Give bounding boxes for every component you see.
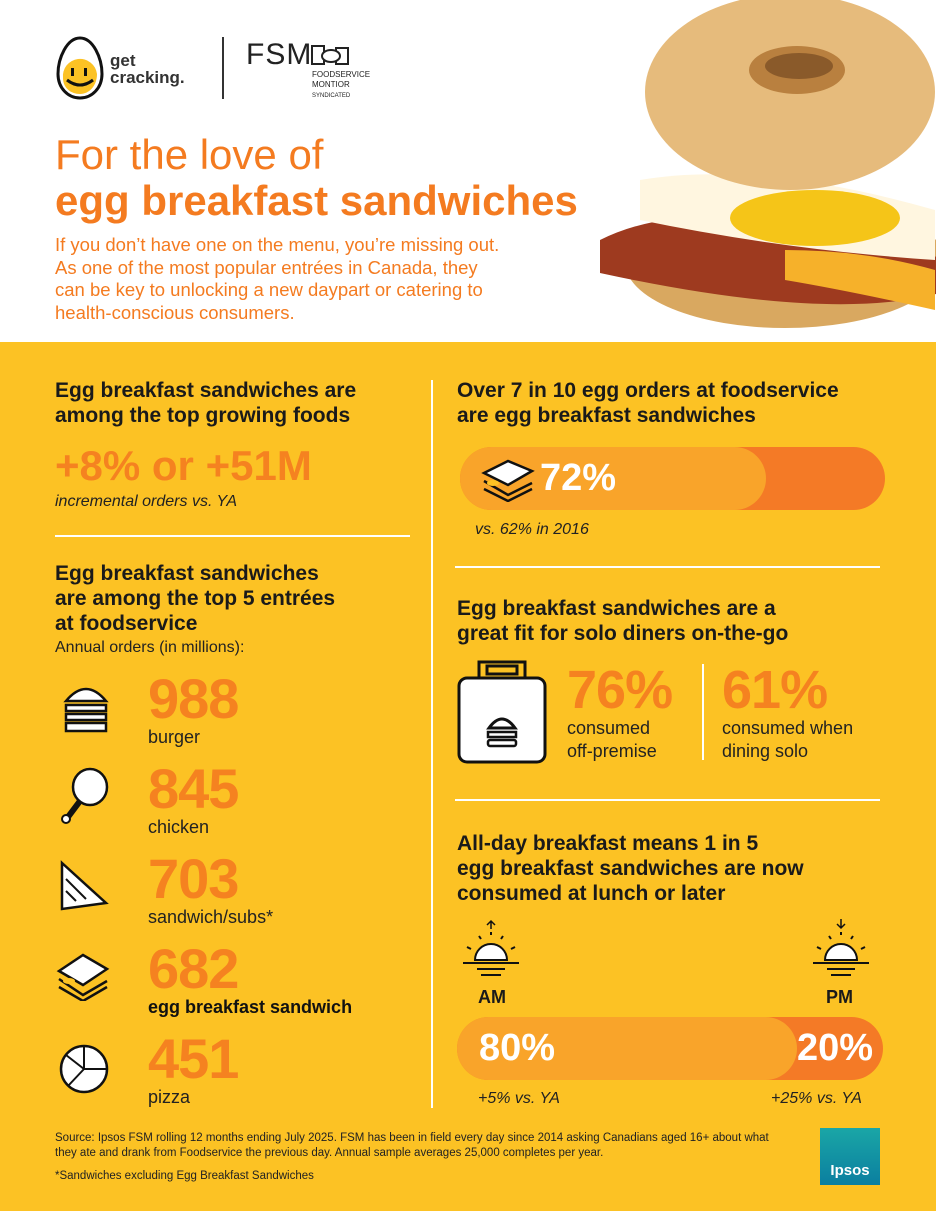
- logo: get cracking: [56, 36, 185, 100]
- item: pizza: pizza: [148, 1087, 190, 1107]
- subtitle: [55, 234, 499, 322]
- item: burger: 988: [148, 667, 238, 730]
- panel: solo diners: dining solo: [722, 741, 808, 761]
- panel: solo diners: 61%: [722, 660, 827, 720]
- panel: solo diners: off-premise: [567, 741, 657, 761]
- footer: source: Source: Ipsos FSM rolling 12 months ending July 2025. FSM has been in field every day since 2014 asking Canadians aged 16+ about what they ate and drank from Foodservice the previous day. Annual sample averages 25,000 completes per year.: [55, 1132, 769, 1158]
- panel: solo diners: Egg breakfast sandwiches are a great fit for solo diners on-the-go: [457, 597, 788, 645]
- panel: all-day breakfast: +5% vs. YA: [478, 1090, 560, 1107]
- panel: solo diners: 76%: [567, 660, 672, 720]
- item: sandwich: sandwich/subs*: [148, 907, 273, 927]
- icon: sunrise AM: AM: [478, 987, 506, 1007]
- item: chicken: chicken: [148, 817, 209, 837]
- subtitle: can be key to unlocking a new daypart or catering to: [55, 279, 483, 300]
- panel: top 5 entrees: [55, 562, 352, 1107]
- panel: 7 in 10: vs. 62% in 2016: [475, 521, 589, 538]
- subtitle: health-conscious consumers.: [55, 302, 295, 322]
- logo: FSM: [246, 38, 370, 99]
- item: egg breakfast sandwich: [56, 937, 352, 1017]
- logo: get cracking: cracking.: [110, 68, 185, 87]
- image: bagel sandwich: [600, 0, 936, 328]
- icon: sunset PM: PM: [826, 987, 853, 1007]
- item: chicken: [61, 757, 238, 837]
- panel: 7 in 10: [457, 379, 885, 538]
- bar: 72%: [460, 447, 885, 510]
- footer: source: *Sandwiches excluding Egg Breakfast Sandwiches: [55, 1170, 314, 1182]
- logo: FSM: FOODSERVICE: [312, 70, 370, 79]
- item: burger: burger: [148, 727, 200, 747]
- yellow panel: [0, 342, 936, 1211]
- panel: top growing: +8% or +51M: [55, 442, 312, 489]
- logo: FSM: MONTIOR: [312, 80, 350, 89]
- item: burger: [63, 667, 238, 747]
- panel: top growing: Egg breakfast sandwiches are among the top growing foods: [55, 379, 356, 427]
- item: pizza: 451: [148, 1027, 238, 1090]
- panel: all-day breakfast: [457, 832, 883, 1107]
- subtitle: If you don’t have one on the menu, you’re missing out.: [55, 234, 499, 255]
- icon: sunrise AM: [463, 920, 519, 1007]
- logo: Ipsos: Ipsos: [830, 1162, 870, 1179]
- panel: all-day breakfast: +25% vs. YA: [771, 1090, 862, 1107]
- bar: 80/20: [457, 1017, 883, 1080]
- panel: top 5 entrees: Egg breakfast sandwiches are among the top 5 entrées at foodservice: [55, 562, 335, 635]
- panel: solo diners: consumed: [567, 718, 650, 738]
- item: sandwich: 703: [148, 847, 238, 910]
- panel: top growing: [55, 379, 356, 510]
- panel: top growing: incremental orders vs. YA: [55, 493, 237, 510]
- icon: sunset PM: [813, 919, 869, 1007]
- title: For the love of: [55, 131, 323, 178]
- logo: get cracking: get: [110, 51, 136, 70]
- item: sandwich: [60, 847, 273, 927]
- panel: all-day breakfast: consumed at lunch or later: [457, 882, 725, 905]
- bar: 72%: 72%: [540, 457, 616, 499]
- panel: 7 in 10: Over 7 in 10 egg orders at foodservice are egg breakfast sandwiches: [457, 379, 839, 427]
- panel: all-day breakfast: All-day breakfast means 1 in 5: [457, 832, 758, 855]
- item: pizza: [60, 1027, 238, 1107]
- panel: solo diners: [457, 597, 853, 764]
- logo: FSM: SYNDICATED: [312, 93, 350, 99]
- item: egg breakfast sandwich: egg breakfast sandwich: [148, 997, 352, 1017]
- title: [55, 131, 578, 224]
- bar: 80/20: 80%: [479, 1027, 555, 1069]
- logo: Ipsos: [820, 1128, 880, 1185]
- bar: 80/20: 20%: [797, 1027, 873, 1069]
- panel: solo diners: consumed when: [722, 718, 853, 738]
- panel: top 5 entrees: Annual orders (in millions):: [55, 639, 244, 656]
- item: chicken: 845: [148, 757, 238, 820]
- logo: FSM: FSM: [246, 38, 312, 71]
- panel: all-day breakfast: egg breakfast sandwiches are now: [457, 857, 804, 880]
- subtitle: As one of the most popular entrées in Canada, they: [55, 256, 478, 278]
- footer: source: [55, 1132, 769, 1182]
- item: egg breakfast sandwich: 682: [148, 937, 238, 1000]
- title: egg breakfast sandwiches: [55, 177, 578, 224]
